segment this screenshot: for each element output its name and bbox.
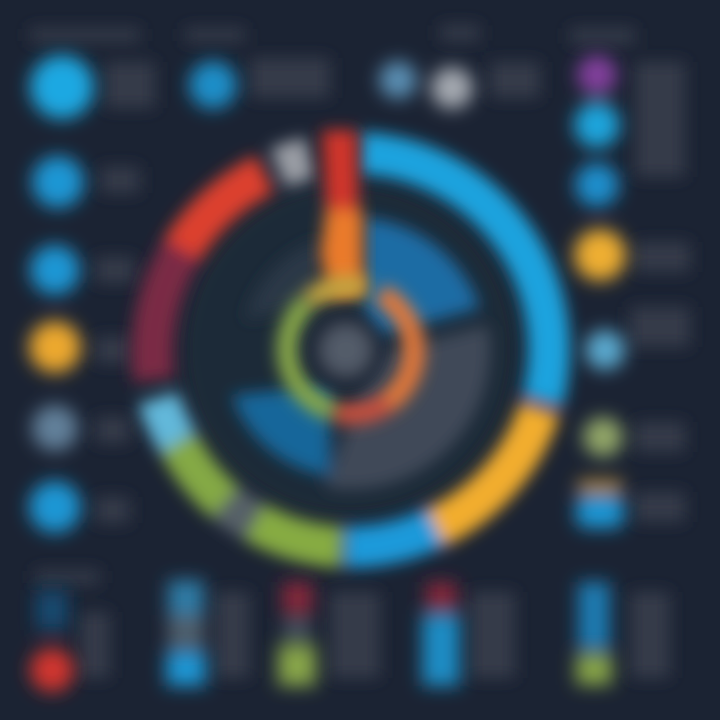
top row icons (189, 61, 473, 109)
wedge: lower left blue (232, 385, 330, 476)
left column icons (29, 55, 94, 533)
bar column 1: dark blue (36, 590, 68, 630)
icon: blue (30, 245, 80, 295)
icon: blue (575, 163, 619, 207)
inner wedges (232, 218, 490, 489)
bar column 2: grey (168, 615, 204, 650)
icon: light blue (585, 330, 625, 370)
ring: grey gap (225, 502, 255, 522)
bar column 3: grey (284, 618, 310, 640)
icon: blue (32, 156, 84, 208)
icon: steel blue (379, 61, 417, 99)
icon: top-left blue (30, 55, 94, 119)
icon: yellow (574, 229, 626, 281)
centre ring: orange right (380, 294, 414, 402)
spike: orange lower (320, 210, 363, 300)
ring: red arc (182, 174, 265, 250)
ring: pale grey segment (278, 158, 310, 168)
bottom row bars (30, 580, 612, 692)
ring: large blue arc (360, 153, 549, 402)
icon: blue (29, 481, 81, 533)
bar column 3: maroon (282, 582, 313, 614)
icon: purple (577, 55, 617, 95)
ring: yellow arc (436, 408, 540, 527)
bar column 4: blue (422, 614, 460, 686)
wedge: upper right blue (364, 218, 480, 340)
icon: grey (431, 67, 473, 109)
centre rings (287, 286, 414, 414)
wedge: upper left smudge (245, 240, 320, 320)
ring: bottom blue arc (345, 522, 445, 547)
bar column 2: steel (168, 580, 204, 615)
icon: blue base (576, 495, 624, 528)
centre ring: green left (287, 302, 332, 410)
bar column 5: green (576, 654, 612, 685)
bar column 5: blue (578, 582, 610, 650)
centre ring: yellow top (310, 286, 365, 300)
ring: light blue segment (158, 398, 178, 442)
icon: grey blue (32, 405, 78, 451)
central flame spike (320, 130, 363, 300)
bar column 3: green (278, 645, 316, 686)
ring: maroon arc (152, 250, 182, 380)
outer ring segments (152, 153, 549, 547)
centre hub (306, 310, 386, 390)
right column icons (574, 55, 626, 528)
bar column 1: red (30, 648, 74, 692)
icon: olive (583, 417, 623, 457)
wedge: lower right grey (325, 325, 490, 489)
ring: bottom green arc (255, 522, 342, 547)
centre ring: red bottom (335, 402, 388, 414)
bar column 4: maroon (426, 582, 457, 610)
icon: blue (574, 102, 620, 148)
icon: blue (189, 61, 237, 109)
ring: left green arc (178, 442, 225, 502)
spike: red top (322, 130, 359, 215)
icon: yellow (29, 321, 81, 373)
bar column 2: blue (166, 652, 206, 686)
donut inner disc (182, 182, 518, 518)
icon: blue with yellow top (578, 481, 622, 491)
